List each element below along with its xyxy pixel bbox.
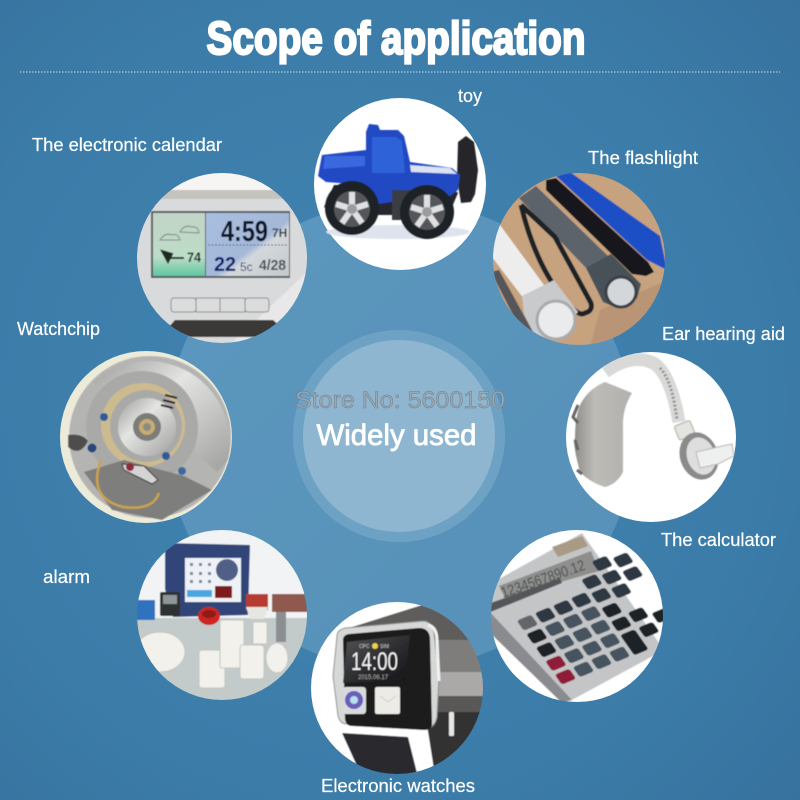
icon: clockwork xyxy=(68,356,231,520)
icon: watch case: 2015.06.17 xyxy=(358,675,389,681)
item: watch movement xyxy=(58,349,234,525)
title: Scope of application xyxy=(206,12,586,64)
label: alarm: alarm xyxy=(43,567,90,587)
icon: LCD screen: 22 xyxy=(214,254,236,276)
icon: grey flashlight xyxy=(519,186,610,270)
icon: watch case xyxy=(333,621,439,730)
label: electronic watches: Electronic watches xyxy=(321,776,475,796)
icon: LCD screen xyxy=(151,211,290,278)
icon: calculator xyxy=(491,532,663,702)
item: flashlight xyxy=(491,171,667,347)
icon: LCD screen: 7H xyxy=(272,226,287,240)
red siren xyxy=(198,607,220,625)
keys xyxy=(517,552,663,684)
center label: Widely used xyxy=(316,419,476,452)
item: smart watch xyxy=(309,600,485,777)
adapter xyxy=(160,592,180,616)
icon: hearing aid xyxy=(573,360,734,487)
icon: calculator: 1234567890.12 xyxy=(499,557,588,602)
app icons xyxy=(343,687,366,714)
label: flashlight: The flashlight xyxy=(588,148,698,168)
wheels xyxy=(325,181,379,235)
icon: blue flashlight xyxy=(556,172,667,270)
label: electronic calendar: The electronic calendar xyxy=(32,135,222,155)
icon: LCD screen: 74 xyxy=(187,249,201,265)
item: toy xyxy=(314,98,486,270)
icon: blue toy jeep xyxy=(318,124,478,239)
item: alarm xyxy=(135,528,310,703)
item: hearing aid xyxy=(566,352,736,522)
label: hearing aid: Ear hearing aid xyxy=(662,324,785,344)
strap xyxy=(352,605,469,641)
sensors xyxy=(135,620,288,688)
icon: watch case: CPC xyxy=(359,644,370,650)
center badge xyxy=(293,330,505,542)
icon: control panel xyxy=(165,543,250,617)
buttons xyxy=(171,298,269,312)
background disc xyxy=(166,201,634,669)
icon: LCD screen: 5c xyxy=(240,260,253,274)
store number watermark: Store No: 5600150 xyxy=(295,387,505,414)
strap xyxy=(521,205,591,314)
icon: silver flashlight xyxy=(492,225,544,299)
icon: LCD screen: 4:59 xyxy=(221,216,268,248)
icon: LCD screen: 4/28 xyxy=(259,257,286,274)
item: electronic calendar xyxy=(135,171,309,345)
label: watchchip: Watchchip xyxy=(17,319,100,339)
label: toy: toy xyxy=(458,86,482,106)
item: calculator xyxy=(491,530,663,702)
screen clock: 14:00 xyxy=(351,648,398,676)
label: calculator: The calculator xyxy=(661,530,776,550)
icon: watch case: SIM xyxy=(380,644,389,650)
